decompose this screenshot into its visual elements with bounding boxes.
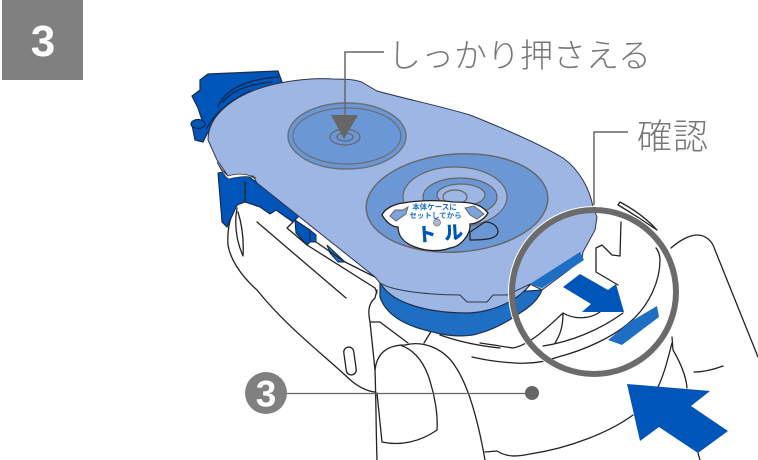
disc: second reel: [363, 148, 551, 258]
step number badge: [2, 0, 83, 80]
part marker 3: [245, 372, 539, 414]
blue alignment mark on body: [530, 252, 584, 288]
device: light blue lower crescent: [380, 283, 530, 313]
sticker label: セットしてから: [409, 211, 462, 220]
magnifier circle: [509, 207, 679, 377]
device: top-left dark blue reel: [191, 71, 282, 142]
device: lower-left dark blue parts: [218, 170, 377, 293]
hand and case outlines: [228, 202, 758, 460]
sticker label: [382, 201, 488, 251]
device: blue ring under body: [380, 283, 542, 336]
arrow: slide direction: [563, 274, 624, 312]
part marker 3: 3: [256, 374, 276, 414]
sticker label: 本体ケースに: [412, 202, 457, 212]
disc: press point: [288, 103, 406, 169]
illustration: device and hand: [191, 71, 758, 460]
step number badge: 3: [31, 17, 55, 66]
blue alignment mark on case: [608, 306, 659, 345]
sticker pull tab: [470, 222, 498, 240]
white flap highlight: [217, 162, 256, 179]
arrow: press direction: [627, 384, 728, 453]
sticker label: トル: [416, 222, 464, 247]
callout: check: [594, 118, 708, 205]
device: light blue main body: [208, 79, 597, 302]
callout: press firmly: [331, 37, 651, 139]
callout: check: 確認: [637, 118, 708, 157]
callout: press firmly: しっかり押さえる: [388, 37, 651, 74]
